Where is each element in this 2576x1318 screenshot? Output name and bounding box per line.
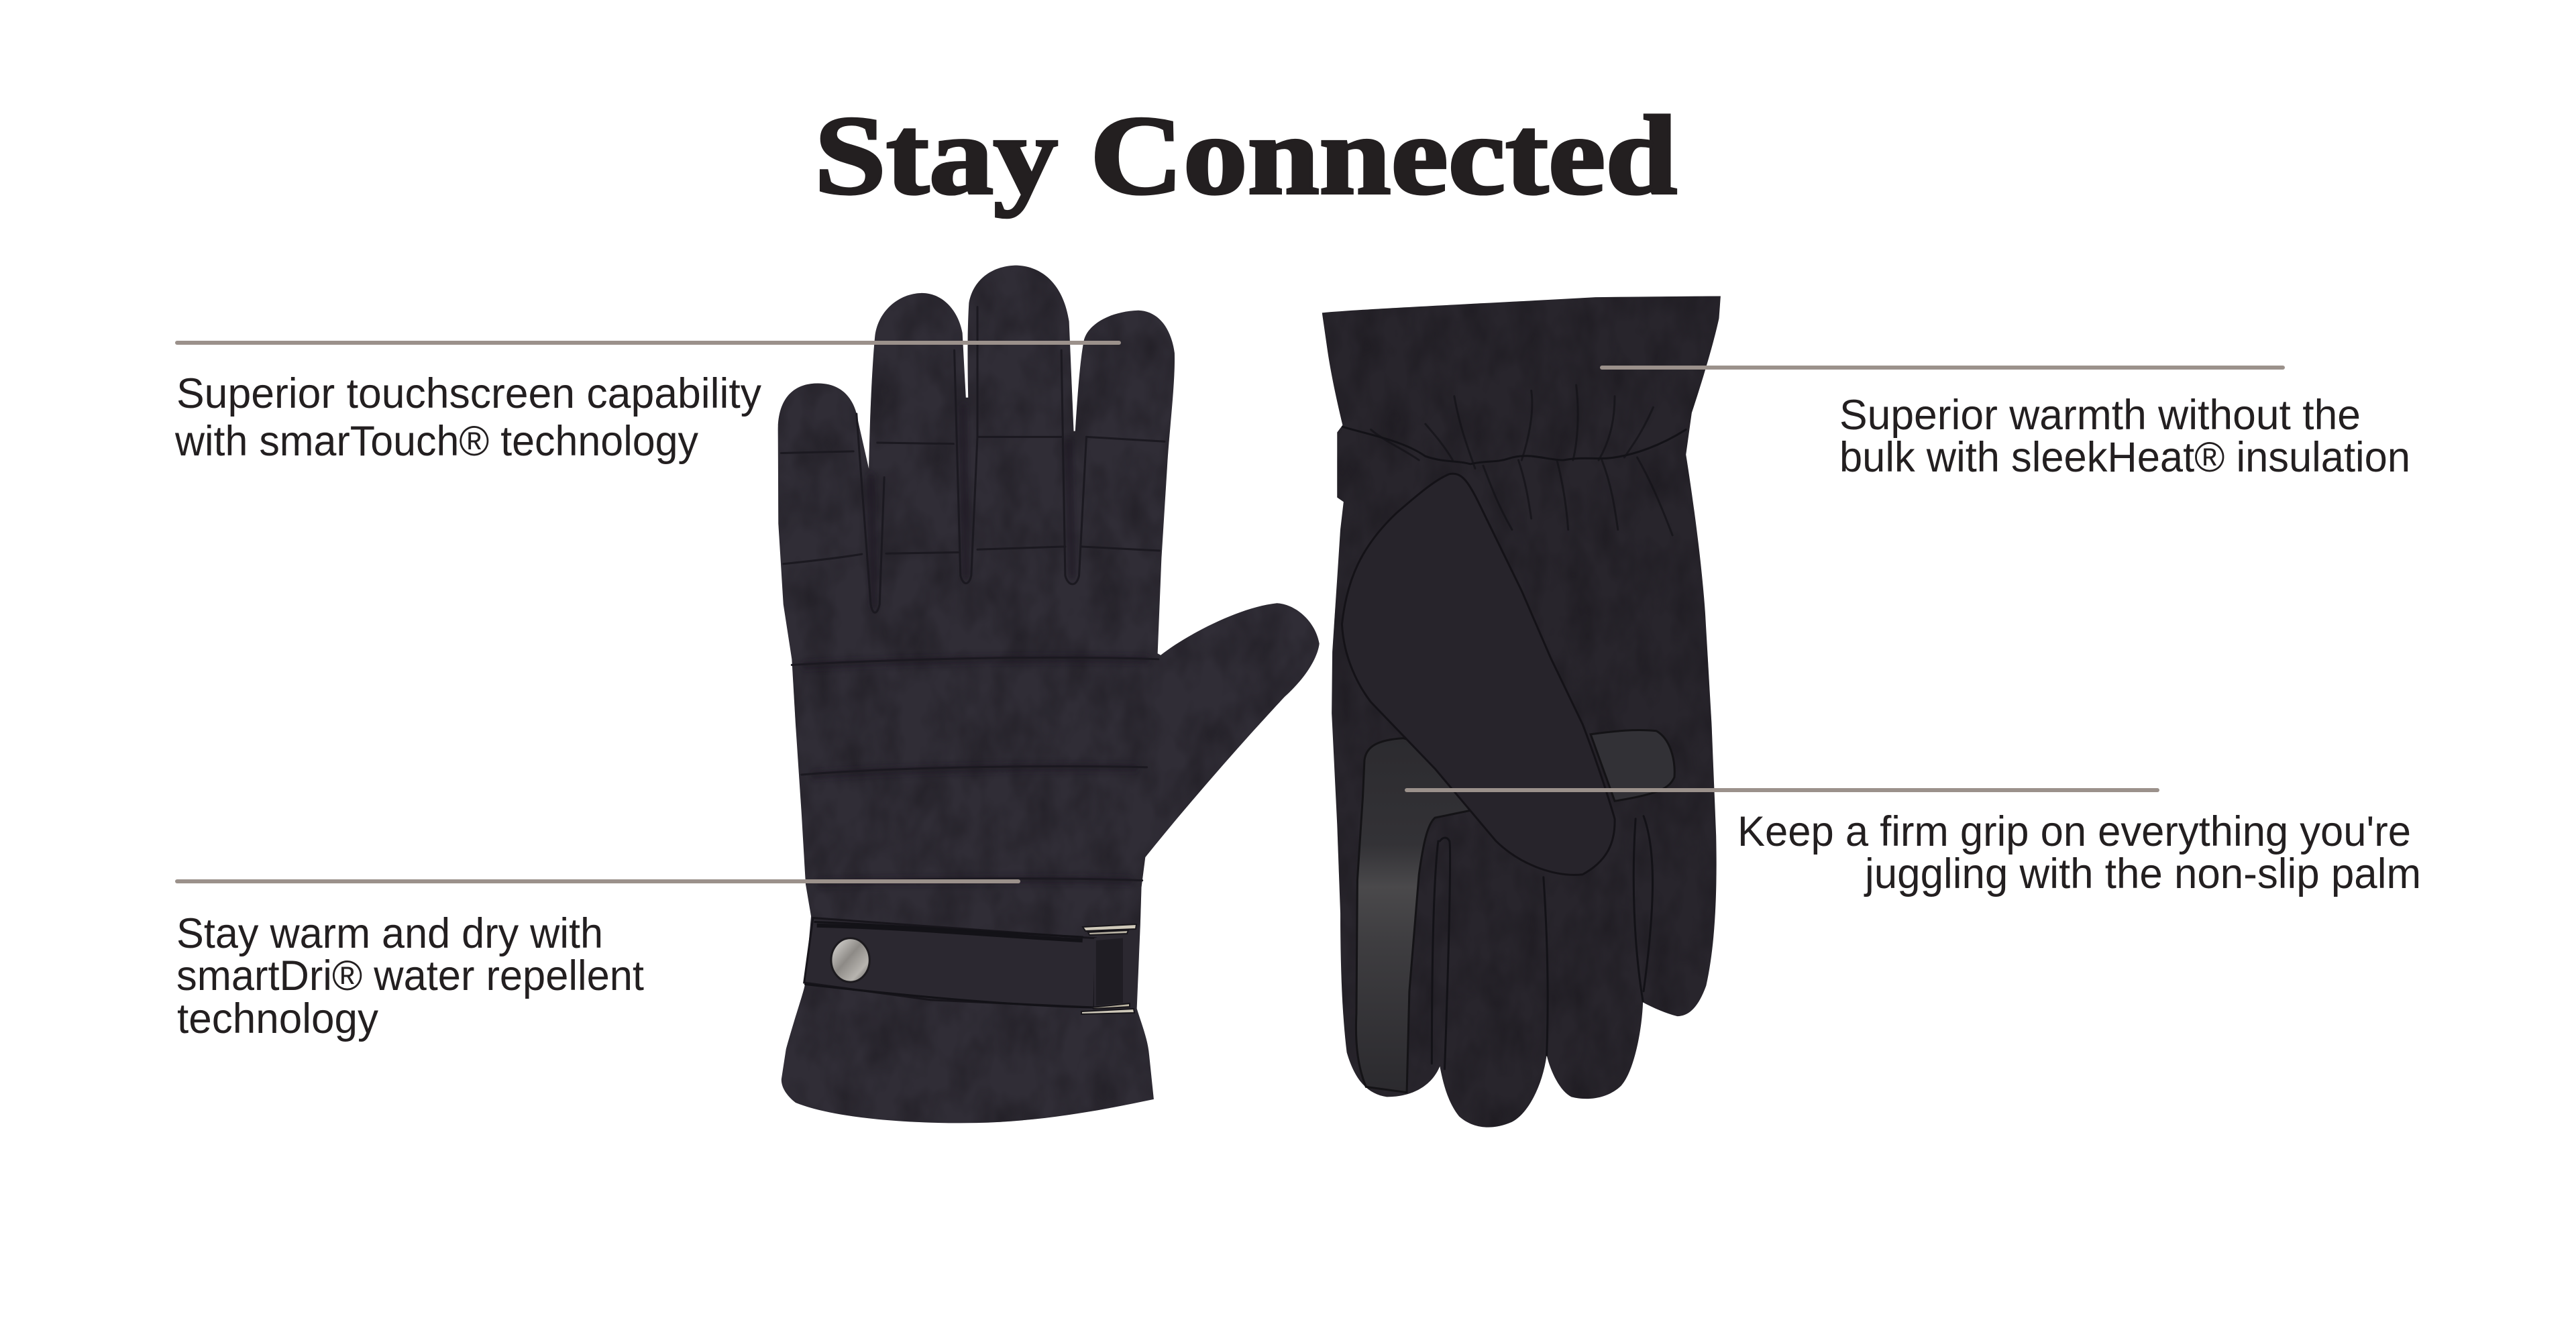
- leather grip patch right: [1591, 730, 1674, 801]
- callout: touchscreen: Superior touchscreen capability: [176, 370, 761, 417]
- glove silhouette: [1322, 296, 1721, 1128]
- right glove: palm side: [1322, 296, 1721, 1128]
- quilting and finger seams: [781, 307, 1165, 883]
- callout: non-slip palm: Keep a firm grip on everything you're: [1737, 808, 2411, 855]
- leather palm patch: [1356, 738, 1470, 1093]
- cuff gathers: [1342, 385, 1686, 535]
- callout: insulation: bulk with sleekHeat® insulation: [1839, 434, 2410, 481]
- callout: non-slip palm: juggling with the non-slip palm: [1864, 850, 2421, 897]
- glove silhouette: [778, 266, 1320, 1123]
- snap button: [831, 938, 869, 982]
- wrist strap: [804, 918, 1139, 1009]
- callout: water repellent: Stay warm and dry with: [176, 910, 603, 957]
- callout: water repellent: technology: [177, 995, 378, 1042]
- thumb: [1342, 474, 1615, 875]
- finger seams: [1432, 816, 1653, 1069]
- leader line: palm: [1407, 788, 2157, 792]
- callout: water repellent: smartDri® water repellent: [176, 952, 644, 999]
- leader line: touchscreen: [177, 341, 1119, 345]
- leader line: water repellent: [177, 879, 1018, 883]
- left glove: back of hand: [778, 266, 1320, 1123]
- fabric mottling: [1322, 296, 1721, 1128]
- callout: insulation: Superior warmth without the: [1839, 392, 2361, 439]
- callout: touchscreen: with smarTouch® technology: [174, 418, 698, 465]
- fabric mottling: [778, 266, 1320, 1123]
- strap buckle: [1081, 924, 1136, 1014]
- leader line: insulation: [1602, 366, 2283, 370]
- title: Stay Connected: [814, 93, 1677, 218]
